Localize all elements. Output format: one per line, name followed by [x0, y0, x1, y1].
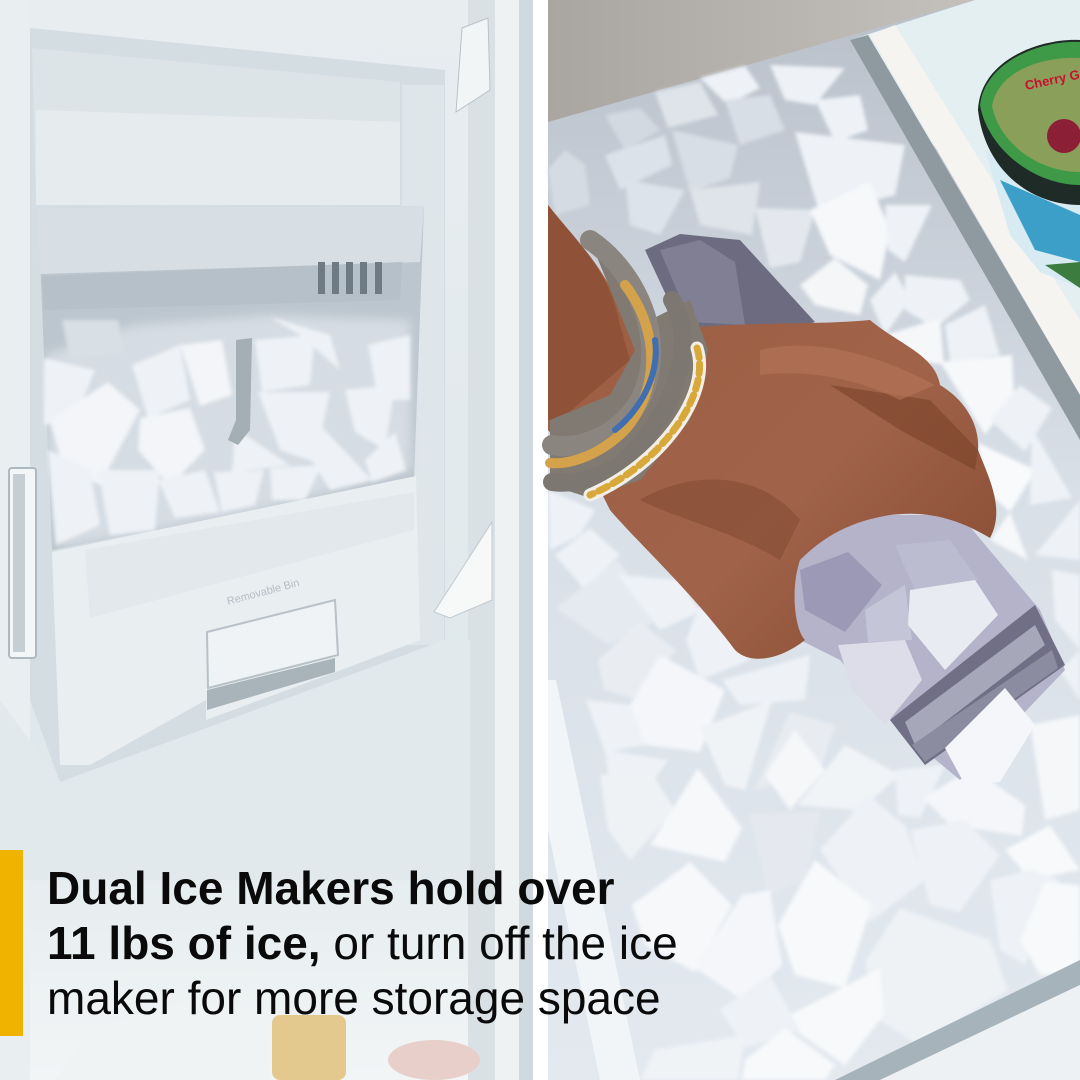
stainless top — [548, 0, 975, 122]
door recess — [30, 28, 445, 782]
door handle slot — [9, 468, 36, 658]
top right interior — [850, 0, 1080, 330]
panel: right freezer drawer full of ice — [548, 0, 1080, 1080]
panel: left freezer door ice bin — [0, 0, 533, 1080]
accent bar — [0, 850, 23, 1036]
ice cream tub — [978, 40, 1080, 288]
ice cubes in left bin — [44, 315, 412, 548]
bin front tray — [52, 476, 420, 765]
bracelets — [550, 240, 708, 498]
bottom items — [55, 1000, 270, 1080]
caption text — [47, 862, 678, 1024]
caption text: maker for more storage space — [47, 972, 661, 1024]
bottle top dark part — [645, 234, 815, 330]
arm and hand — [548, 205, 996, 659]
drawer front edge — [548, 680, 640, 1080]
panel: left freezer door ice bin: Removable Bin — [226, 577, 301, 608]
ice cubes — [548, 65, 1080, 1080]
clear ice bin body — [38, 206, 424, 550]
hinge clips — [456, 18, 490, 112]
divider — [533, 0, 548, 1080]
water bottle with ice — [780, 515, 1065, 785]
caption text: Dual Ice Makers hold over — [47, 862, 615, 914]
lower door area — [0, 640, 470, 880]
caption text: 11 lbs of ice, or turn off the ice — [47, 917, 678, 969]
